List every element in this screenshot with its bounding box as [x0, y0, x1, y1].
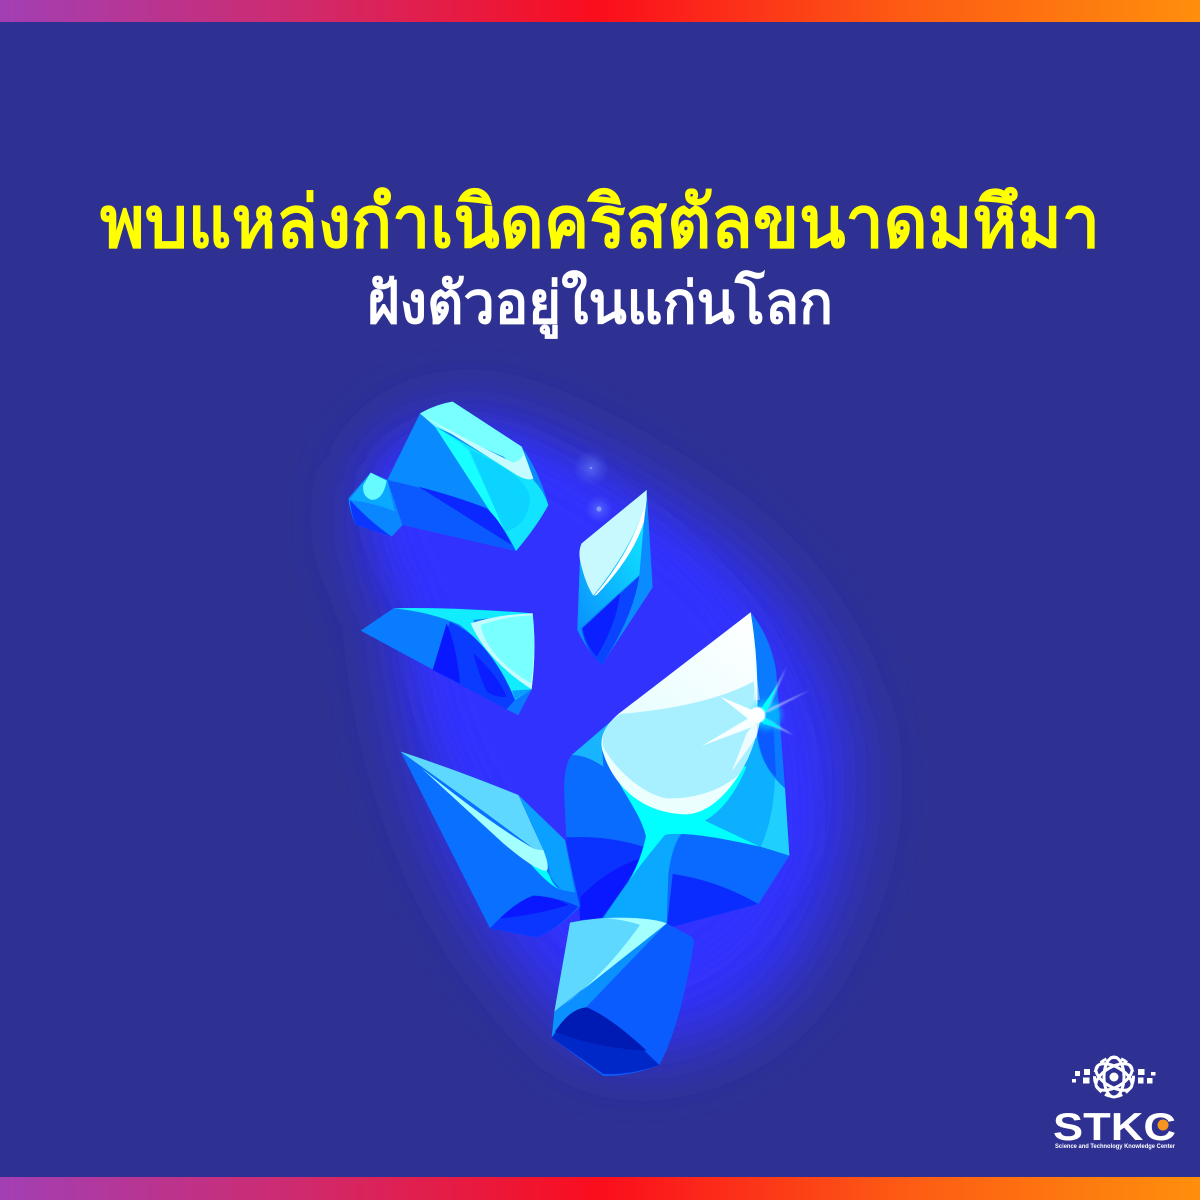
facet: lower left: [566, 837, 643, 920]
logo wordmark: STKC: [1053, 1106, 1176, 1149]
crystal: upper right shard: [577, 490, 653, 665]
logo dot: [1158, 1120, 1168, 1130]
facet: upper left: [572, 715, 618, 767]
title line 2: ฝังตัวอยู่ในแก่นโลก: [367, 268, 833, 339]
crystal: top-left large: [387, 402, 548, 551]
STKC logo: [1053, 1057, 1176, 1150]
crystal: bottom block: [552, 917, 694, 1076]
icon: atom nucleus: [1110, 1072, 1118, 1082]
crystal group upper: [348, 402, 653, 715]
sparkle: [702, 633, 810, 772]
logo tagline: Science and Technology Knowledge Center: [1055, 1144, 1176, 1150]
top gradient bar: [0, 0, 1200, 22]
title: [100, 183, 1100, 339]
crystal: lower left shard: [401, 752, 580, 937]
crystal group lower: [401, 752, 694, 1076]
facet: light main: [601, 612, 758, 814]
crystal: large main: [564, 612, 810, 928]
facet: right: [705, 733, 789, 856]
crystal: small chip: [348, 473, 403, 537]
title line 1: พบแหล่งกำเนิดคริสตัลขนาดมหึมา: [100, 183, 1100, 263]
facet: center lower: [603, 832, 683, 923]
facet: cyan star: [602, 747, 760, 882]
sparkle dots: [573, 450, 613, 523]
facet: right lower: [673, 832, 789, 904]
bottom gradient bar: [0, 1177, 1200, 1200]
crystal: middle left wedge: [361, 608, 534, 715]
icon: atom: [1092, 1057, 1136, 1097]
icon: pixel squares: [1072, 1069, 1156, 1084]
blue glow behind crystals: [362, 418, 850, 1051]
